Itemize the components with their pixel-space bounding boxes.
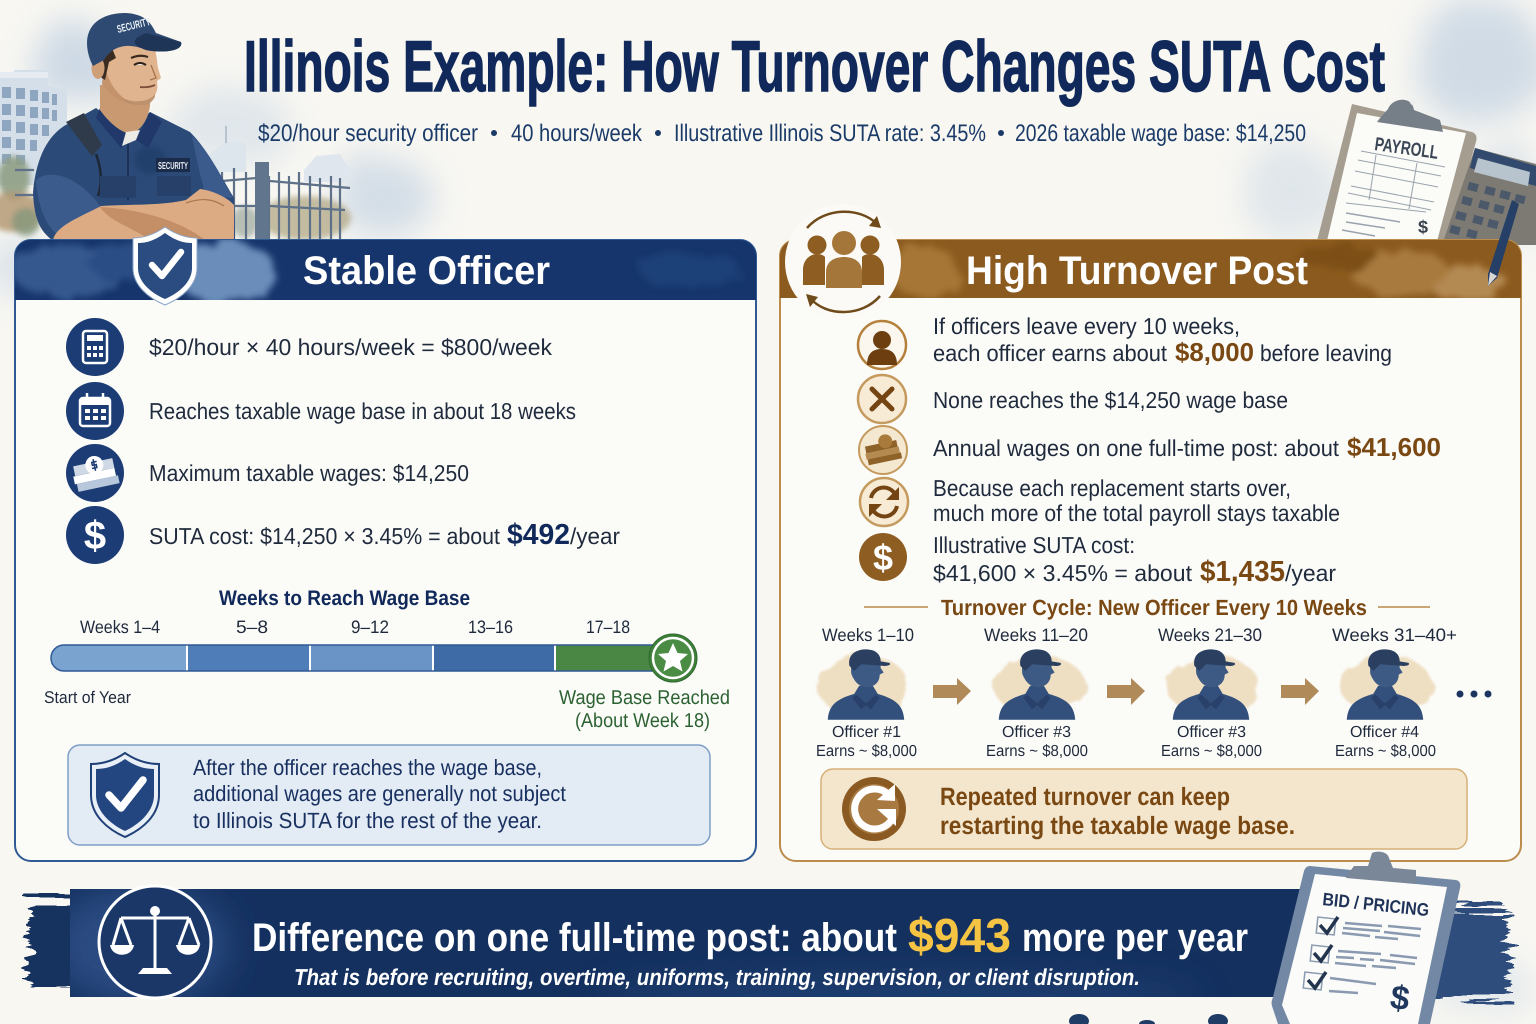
turnover cycle heading: Turnover Cycle: New Officer Every 10 Weeks: [941, 595, 1367, 620]
row: SUTA cost: $: [84, 514, 106, 558]
row: replacement starts over: [860, 475, 1340, 526]
timeline week labels: 13–16: [468, 617, 513, 637]
arrow: [933, 678, 971, 705]
hair and ear: [97, 48, 116, 80]
row: illustrative SUTA cost: $1,435: [1200, 556, 1285, 588]
officer 2 step: Officer #3: [1002, 724, 1071, 741]
row: officers leave: If officers leave every 10 weeks,: [933, 313, 1240, 339]
end label: [559, 687, 730, 732]
callout: wage base note: [68, 745, 710, 845]
banner brush band: [21, 889, 1519, 1005]
officer 3 step: [1158, 625, 1262, 760]
callout text: to Illinois SUTA for the rest of the year.: [193, 808, 542, 833]
row: SUTA cost: [66, 506, 620, 564]
panel body: [780, 240, 1521, 861]
cap: [87, 13, 181, 66]
illustration: security guard: SECURITY: [158, 161, 188, 172]
row: illustrative SUTA cost: /year: [1285, 560, 1336, 586]
end label: (About Week 18): [575, 710, 710, 732]
officer 3 step: Weeks 21–30: [1158, 625, 1262, 645]
crossed arms: [53, 189, 234, 240]
panel header band: [10, 240, 756, 302]
neck: [100, 85, 150, 134]
officer 1 step: [816, 625, 917, 760]
timeline week labels: 5–8: [236, 617, 268, 637]
arrow: [1281, 678, 1319, 705]
subtitle: Illustrative Illinois SUTA rate: 3.45%: [674, 120, 986, 147]
banner headline: more per year: [1022, 916, 1248, 960]
illustration: bid pricing clipboard: $: [1388, 978, 1412, 1019]
row: officers leave: $8,000: [1175, 337, 1254, 367]
row: weekly wage: $20/hour × 40 hours/week = $800/week: [149, 334, 552, 360]
timeline title: Weeks to Reach Wage Base: [219, 587, 470, 610]
timeline week labels: [80, 617, 630, 637]
icon: restart arrow: [842, 777, 906, 841]
officer 2 step: Earns ~ $8,000: [986, 743, 1088, 760]
officer 1 step: Earns ~ $8,000: [816, 743, 917, 760]
officer 3 step: Earns ~ $8,000: [1161, 743, 1262, 760]
bottom edge officer heads: [1069, 1014, 1228, 1024]
officer 2 step: Weeks 11–20: [984, 625, 1088, 645]
banner headline: Difference on one full-time post: about: [252, 916, 897, 960]
radio mic: [66, 113, 102, 156]
row: illustrative SUTA cost: $: [873, 537, 893, 578]
row: none reaches wage base: None reaches the $14,250 wage base: [933, 387, 1288, 413]
callout: restart note: restarting the taxable wage base.: [940, 812, 1295, 840]
callout text: [193, 755, 566, 833]
row: officers leave: before leaving: [1260, 340, 1392, 366]
timeline week labels: 17–18: [586, 617, 630, 637]
panel: stable officer: [10, 227, 756, 861]
row: reaches wage base: [66, 382, 576, 440]
officer 3 step: Officer #3: [1177, 724, 1246, 741]
illustration: security guard: [33, 13, 235, 240]
callout: restart note: [821, 769, 1467, 849]
illustration: security guard: SECURITY: [116, 16, 152, 36]
background trees and fence: [0, 156, 351, 240]
subtitle: 2026 taxable wage base: $14,250: [1015, 120, 1306, 147]
row: illustrative SUTA cost: Illustrative SUTA cost:: [933, 532, 1135, 558]
row: weekly wage: [66, 318, 552, 376]
row: replacement starts over: much more of the total payroll stays taxable: [933, 500, 1340, 526]
officer 4 step: [1332, 625, 1457, 760]
timeline: weeks to reach wage base: [44, 587, 730, 732]
subtitle: [258, 120, 1306, 147]
header title: High Turnover Post: [966, 249, 1308, 293]
row: SUTA cost: SUTA cost: $14,250 × 3.45% = about: [149, 523, 501, 549]
row: officers leave: [858, 313, 1392, 369]
pen: [1488, 200, 1519, 286]
subtitle: $20/hour security officer: [258, 120, 478, 147]
continuation dots: [1456, 690, 1492, 698]
row: maximum taxable wages: Maximum taxable wages: $14,250: [149, 460, 469, 486]
panel: high turnover post: [780, 204, 1521, 861]
officer 4 step: Earns ~ $8,000: [1335, 743, 1436, 760]
illustration: payroll clipboard: [1316, 99, 1536, 245]
torso and sleeves: [33, 108, 235, 240]
officer 4 step: Weeks 31–40+: [1332, 625, 1457, 645]
subtitle: 40 hours/week: [511, 120, 643, 147]
progress bar: [51, 645, 671, 671]
icon: scales of justice: [99, 886, 211, 998]
row: none reaches wage base: [858, 375, 1288, 423]
facial features: [131, 56, 148, 58]
name badge: [156, 158, 190, 172]
icon: shield check: [133, 227, 197, 305]
panel header band: [780, 240, 1521, 301]
row: officers leave: each officer earns about: [933, 340, 1168, 366]
callout: restart note: Repeated turnover can keep: [940, 783, 1230, 811]
icon: shield check callout: [91, 753, 159, 837]
banner headline: $943: [908, 910, 1011, 963]
row: annual wages: $41,600: [1347, 432, 1441, 462]
illustration: payroll clipboard: $: [1418, 217, 1428, 237]
icon: team with cycle arrows: [785, 204, 901, 320]
row: SUTA cost: /year: [570, 523, 620, 549]
row: illustrative SUTA cost: [859, 532, 1336, 588]
panel body: [15, 240, 756, 861]
end label: Wage Base Reached: [559, 687, 730, 709]
banner subtext: That is before recruiting, overtime, uniforms, training, supervision, or client disruption.: [294, 964, 1140, 990]
timeline week labels: Weeks 1–4: [80, 617, 160, 637]
illustration: payroll clipboard: PAYROLL: [1373, 134, 1440, 164]
pockets: [100, 176, 136, 198]
arrow: [1107, 678, 1145, 705]
officer 1 step: Officer #1: [832, 724, 901, 741]
illustration: bid pricing clipboard: BID / PRICING: [1322, 889, 1430, 920]
callout text: After the officer reaches the wage base,: [193, 755, 542, 780]
officer 2 step: [984, 625, 1088, 760]
row: annual wages: Annual wages on one full-time post: about: [933, 435, 1340, 461]
callout text: additional wages are generally not subject: [193, 781, 566, 806]
start label: Start of Year: [44, 688, 131, 707]
header title: Stable Officer: [303, 249, 550, 293]
row: replacement starts over: Because each replacement starts over,: [933, 475, 1291, 501]
row: maximum taxable wages: [66, 444, 469, 502]
officer 1 step: Weeks 1–10: [822, 625, 914, 645]
row: annual wages: [859, 426, 1441, 474]
background buildings: [0, 70, 350, 185]
collar: [96, 108, 162, 148]
row: illustrative SUTA cost: $41,600 × 3.45% = about: [933, 560, 1193, 586]
row: reaches wage base: Reaches taxable wage base in about 18 weeks: [149, 398, 576, 424]
timeline week labels: 9–12: [351, 617, 389, 637]
illustration: bid pricing clipboard: [1272, 852, 1460, 1024]
icon: star marker: [649, 634, 697, 682]
row: SUTA cost: $492: [507, 519, 570, 551]
officer 4 step: Officer #4: [1350, 724, 1419, 741]
banner headline: [252, 910, 1248, 963]
banner: difference summary: [21, 884, 1519, 1005]
face: [104, 46, 161, 105]
